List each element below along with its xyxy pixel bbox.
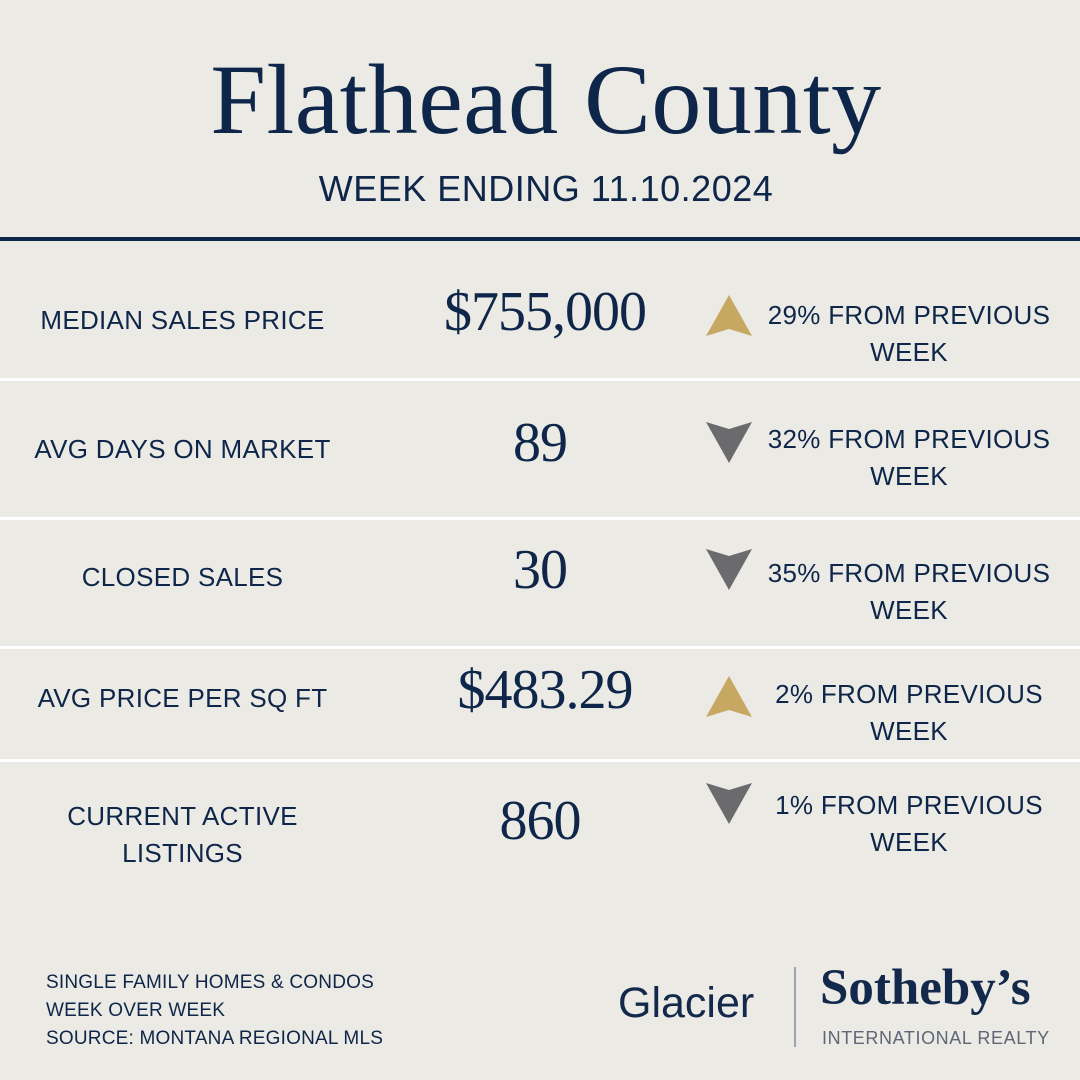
label: AVG PRICE PER SQ FT: [38, 683, 327, 713]
change: 29% FROM PREVIOUS WEEK: [768, 300, 1050, 367]
logo: [618, 960, 1050, 1048]
icon: down arrow: [706, 422, 752, 463]
label: CURRENT ACTIVE LISTINGS: [67, 801, 298, 868]
row: avg days on market: [34, 412, 1050, 491]
logo: Glacier: [618, 979, 754, 1027]
logo: Sotheby’s: [820, 960, 1031, 1016]
icon: up arrow: [706, 295, 752, 336]
change: 1% FROM PREVIOUS WEEK: [775, 790, 1043, 857]
subtitle: WEEK ENDING 11.10.2024: [319, 168, 773, 209]
row: median sales price: [40, 281, 1050, 367]
label: MEDIAN SALES PRICE: [40, 305, 325, 335]
footnote: [46, 972, 383, 1049]
value: 30: [513, 539, 567, 601]
label: AVG DAYS ON MARKET: [34, 434, 331, 464]
footnote: SINGLE FAMILY HOMES & CONDOS: [46, 972, 374, 993]
icon: up arrow: [706, 676, 752, 717]
icon: down arrow: [706, 549, 752, 590]
change: 32% FROM PREVIOUS WEEK: [768, 424, 1050, 491]
value: 860: [500, 790, 580, 852]
change: 35% FROM PREVIOUS WEEK: [768, 558, 1050, 625]
icon: down arrow: [706, 783, 752, 824]
change: 2% FROM PREVIOUS WEEK: [775, 679, 1043, 746]
row: current active listings: [67, 783, 1043, 868]
value: $755,000: [444, 281, 646, 343]
row: closed sales: [82, 539, 1050, 625]
value: $483.29: [458, 659, 632, 721]
label: CLOSED SALES: [82, 562, 283, 592]
value: 89: [513, 412, 567, 474]
title: Flathead County: [210, 44, 882, 155]
logo: INTERNATIONAL REALTY: [822, 1028, 1050, 1048]
row: avg price per sq ft: [38, 659, 1043, 746]
footnote: WEEK OVER WEEK: [46, 1000, 225, 1021]
footnote: SOURCE: MONTANA REGIONAL MLS: [46, 1028, 383, 1049]
